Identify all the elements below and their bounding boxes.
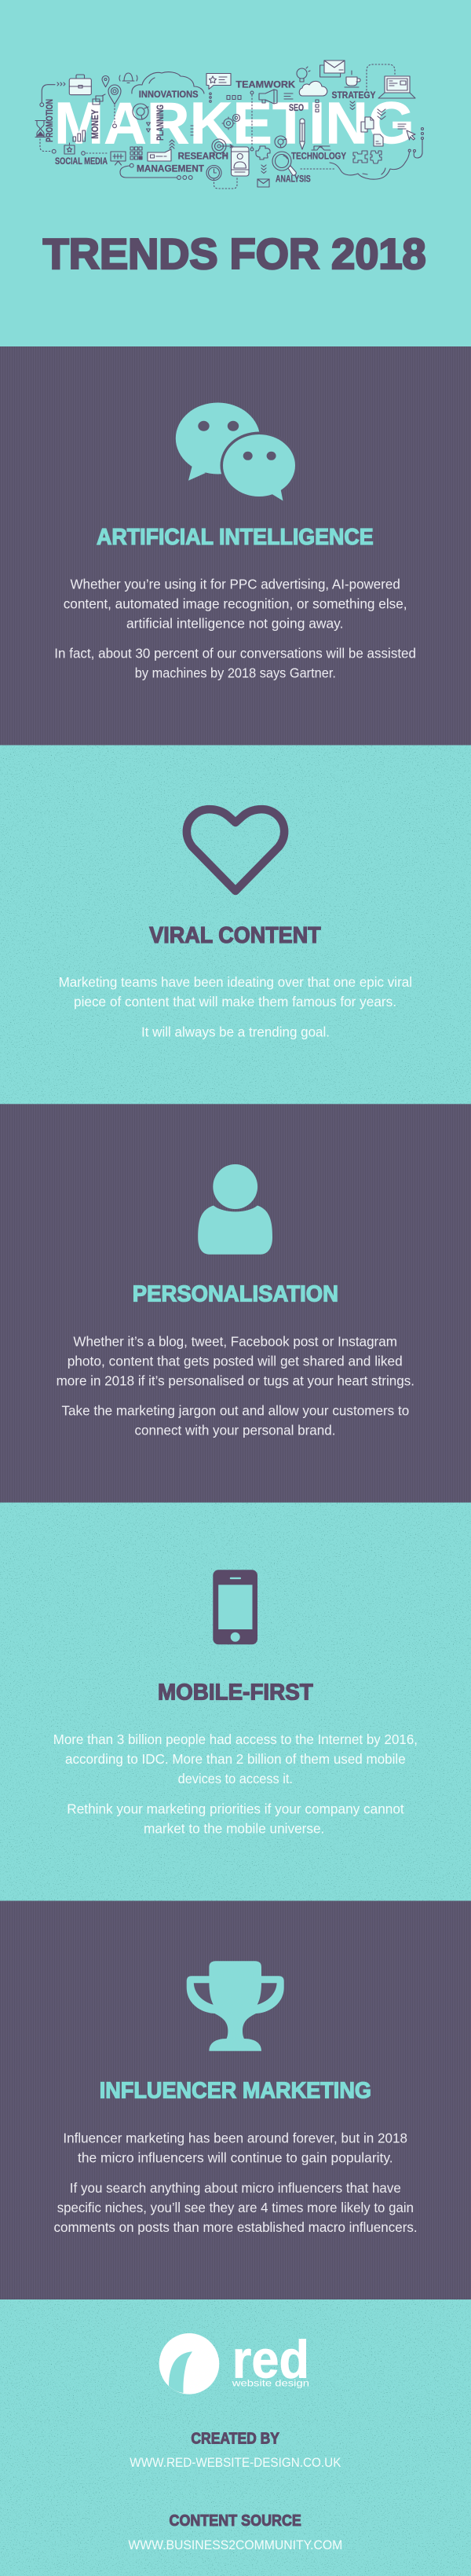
panel: viral content (0, 745, 471, 1104)
word cloud labels: PLANNING (155, 104, 166, 141)
panel: footer credits (0, 2299, 471, 2576)
text block: personalisation: more in 2018 if it’s personalised or tugs at your heart strings. (57, 1372, 414, 1388)
word cloud labels: ANALYSIS (276, 174, 311, 185)
logo: red website design: website design (232, 2378, 309, 2389)
text block: viral content: piece of content that will make them famous for years. (74, 994, 396, 1010)
text block: viral content (59, 974, 412, 1039)
panel: personalisation (0, 1104, 471, 1503)
text block: personalisation: photo, content that gets posted will get shared and liked (68, 1353, 403, 1369)
text block: artificial intelligence: by machines by 2018 says Gartner. (135, 665, 336, 681)
text block: artificial intelligence: artificial intelligence not going away. (126, 615, 343, 631)
panel: influencer marketing (0, 1901, 471, 2299)
word cloud labels: STRATEGY (331, 90, 375, 101)
credit: created by (130, 2431, 341, 2470)
icon: trophy (187, 1961, 284, 2051)
text block: personalisation (57, 1333, 414, 1438)
word cloud labels: TECHNOLOGY (291, 150, 346, 161)
icon: heart (187, 809, 284, 891)
icon: person (198, 1164, 272, 1255)
word cloud labels: MANAGEMENT (137, 163, 205, 174)
word cloud labels: TEAMWORK (236, 79, 296, 90)
credit: created by: WWW.RED-WEBSITE-DESIGN.CO.UK (130, 2455, 341, 2470)
word cloud labels: SOCIAL MEDIA (55, 156, 108, 167)
panel: mobile-first (0, 1503, 471, 1901)
heading: artificial intelligence: ARTIFICIAL INTELLIGENCE (97, 525, 374, 550)
text block: personalisation: Whether it’s a blog, tweet, Facebook post or Instagram (73, 1333, 397, 1349)
panel: artificial intelligence (0, 346, 471, 745)
title: trends for 2018: TRENDS FOR 2018 (43, 229, 426, 278)
icon: chat bubbles (176, 402, 298, 501)
text block: personalisation: Take the marketing jargon out and allow your customers to (61, 1403, 409, 1419)
word: MARKETING: MARKETING (54, 90, 414, 156)
marketing word cloud illustration (35, 60, 424, 189)
text block: artificial intelligence: Whether you’re using it for PPC advertising, AI-powered (71, 576, 400, 592)
word cloud labels: SEO (289, 102, 304, 113)
word cloud labels: RESEARCH (178, 150, 228, 161)
text block: influencer marketing: If you search anything about micro influencers that have (70, 2180, 401, 2196)
text block: mobile-first: devices to access it. (178, 1771, 293, 1786)
credit: content source (128, 2512, 342, 2552)
text block: influencer marketing: specific niches, you’ll see they are 4 times more likely to gain (57, 2200, 414, 2215)
text block: mobile-first: according to IDC. More than 2 billion of them used mobile (65, 1751, 406, 1767)
line icons (35, 60, 424, 189)
credit: content source: CONTENT SOURCE (170, 2512, 301, 2530)
panel: hero header (35, 60, 426, 278)
text block: mobile-first (53, 1731, 418, 1836)
heading: personalisation: PERSONALISATION (133, 1282, 338, 1307)
word cloud labels: INNOVATIONS (139, 89, 199, 100)
text block: mobile-first: More than 3 billion people had access to the Internet by 2016, (53, 1731, 418, 1747)
text block: viral content: It will always be a trending goal. (141, 1024, 330, 1039)
text block: artificial intelligence (54, 576, 416, 681)
logo: red website design: red (232, 2330, 309, 2390)
text block: artificial intelligence: content, automated image recognition, or something else, (64, 595, 407, 611)
word cloud labels: PROMOTION (44, 99, 55, 142)
text block: influencer marketing: the micro influencers will continue to gain popularity. (78, 2149, 393, 2165)
text block: personalisation: connect with your personal brand. (135, 1423, 336, 1438)
text block: artificial intelligence: In fact, about 30 percent of our conversations will be assisted (54, 645, 416, 661)
text block: influencer marketing (53, 2130, 418, 2235)
word cloud labels (44, 79, 375, 185)
credit: created by: CREATED BY (191, 2431, 280, 2448)
logo: red website design (159, 2330, 309, 2395)
heading: viral content: VIRAL CONTENT (149, 923, 321, 948)
heading: mobile-first: MOBILE-FIRST (158, 1680, 313, 1705)
heading: influencer marketing: INFLUENCER MARKETING (100, 2079, 371, 2104)
text block: viral content: Marketing teams have been ideating over that one epic viral (59, 974, 412, 990)
text block: mobile-first: Rethink your marketing priorities if your company cannot (67, 1801, 404, 1817)
text block: influencer marketing: Influencer marketing has been around forever, but in 2018 (63, 2130, 407, 2145)
credit: content source: WWW.BUSINESS2COMMUNITY.COM (128, 2538, 342, 2552)
text block: influencer marketing: comments on posts than more established macro influencers. (53, 2219, 418, 2235)
text block: mobile-first: market to the mobile universe. (144, 1820, 324, 1836)
icon: smartphone (213, 1570, 257, 1644)
word cloud labels: MONEY (89, 109, 100, 139)
